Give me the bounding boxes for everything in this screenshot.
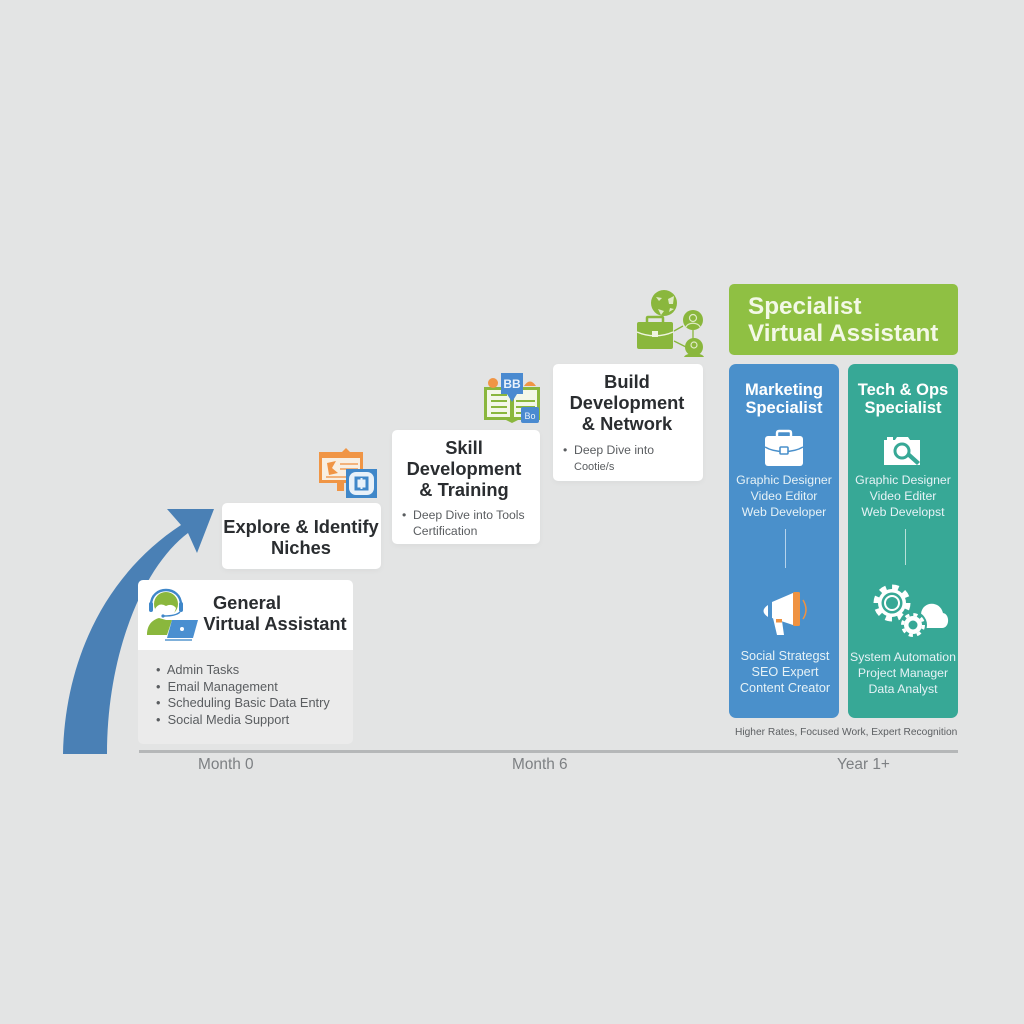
icon: browser window and blue chip [319, 448, 377, 498]
task list: • Email Management [156, 678, 278, 694]
timeline axis [139, 750, 958, 753]
role list one [855, 473, 951, 519]
task list: • Admin Tasks [156, 662, 239, 677]
heading card [138, 580, 353, 650]
panel: general virtual assistant [138, 580, 353, 726]
role list one: Video Editor [751, 489, 817, 503]
heading: Specialist [745, 399, 823, 417]
icon: open book with badges [484, 373, 540, 423]
benefits caption: Higher Rates, Focused Work, Expert Recognition [735, 727, 957, 738]
role list one: Graphic Designer [736, 473, 832, 487]
heading: Tech & Ops [858, 381, 948, 399]
role list one [736, 473, 832, 519]
heading text: & Network [582, 413, 672, 434]
panel: build development and network [553, 364, 703, 481]
icon: open book with badges: BB [503, 377, 521, 391]
role list two: Data Analyst [868, 682, 938, 696]
role list two: Project Manager [858, 666, 948, 680]
task list [156, 662, 330, 726]
icon: headset agent with laptop [147, 588, 198, 641]
heading [745, 381, 823, 417]
heading text: Build [604, 371, 650, 392]
panel: marketing specialist [729, 364, 839, 718]
heading text [570, 371, 684, 434]
heading text: Development [570, 392, 684, 413]
bullet list [563, 443, 654, 472]
heading: Specialist [864, 399, 942, 417]
timeline label: month 6: Month 6 [512, 756, 568, 773]
role list two [850, 650, 956, 696]
heading text: Explore & Identify [223, 516, 379, 537]
task list: • Social Media Support [156, 712, 289, 726]
bullet list: Certification [413, 524, 477, 538]
role list two [740, 649, 830, 695]
role list two: SEO Expert [752, 665, 818, 679]
divider [905, 529, 906, 565]
icon: briefcase [765, 430, 803, 466]
role list one: Video Editer [870, 489, 936, 503]
icon: open book with badges: Bo [524, 411, 536, 421]
bullet list [402, 508, 525, 538]
panel: tech and ops specialist [848, 364, 958, 718]
bullet list: • Deep Dive into [563, 443, 654, 457]
timeline label: year 1+: Year 1+ [837, 756, 890, 773]
role list one: Graphic Designer [855, 473, 951, 487]
role list one: Web Developer [742, 505, 826, 519]
banner text: Specialist [748, 293, 861, 320]
icon: gears and cloud [874, 584, 948, 637]
panel: skill development and training [392, 430, 540, 544]
list background [138, 649, 353, 744]
icon: camera with magnifier [884, 437, 920, 465]
role list two: Content Creator [740, 681, 830, 695]
task list: • Scheduling Basic Data Entry [156, 695, 330, 710]
heading text [223, 516, 379, 558]
banner text [748, 293, 938, 347]
heading text: General [213, 592, 281, 613]
timeline label: month 0: Month 0 [198, 756, 254, 773]
role list two: System Automation [850, 650, 956, 664]
heading text [407, 437, 522, 500]
heading text: Skill [445, 437, 483, 458]
bullet list: • Deep Dive into Tools [402, 508, 525, 522]
banner text: Virtual Assistant [748, 320, 938, 347]
divider [785, 529, 786, 568]
role list one: Web Developst [861, 505, 945, 519]
heading text: Niches [271, 537, 331, 558]
heading [858, 381, 948, 417]
icon: megaphone [764, 592, 807, 635]
heading text: & Training [419, 479, 509, 500]
heading text: Development [407, 458, 521, 479]
heading: Marketing [745, 381, 823, 399]
icon: briefcase network [637, 290, 704, 357]
bullet list: Cootie/s [574, 460, 614, 472]
banner: specialist virtual assistant [729, 284, 958, 355]
role list two: Social Strategst [741, 649, 829, 663]
panel: explore and identify niches [222, 503, 381, 569]
heading card: Virtual Assistant [203, 613, 347, 634]
